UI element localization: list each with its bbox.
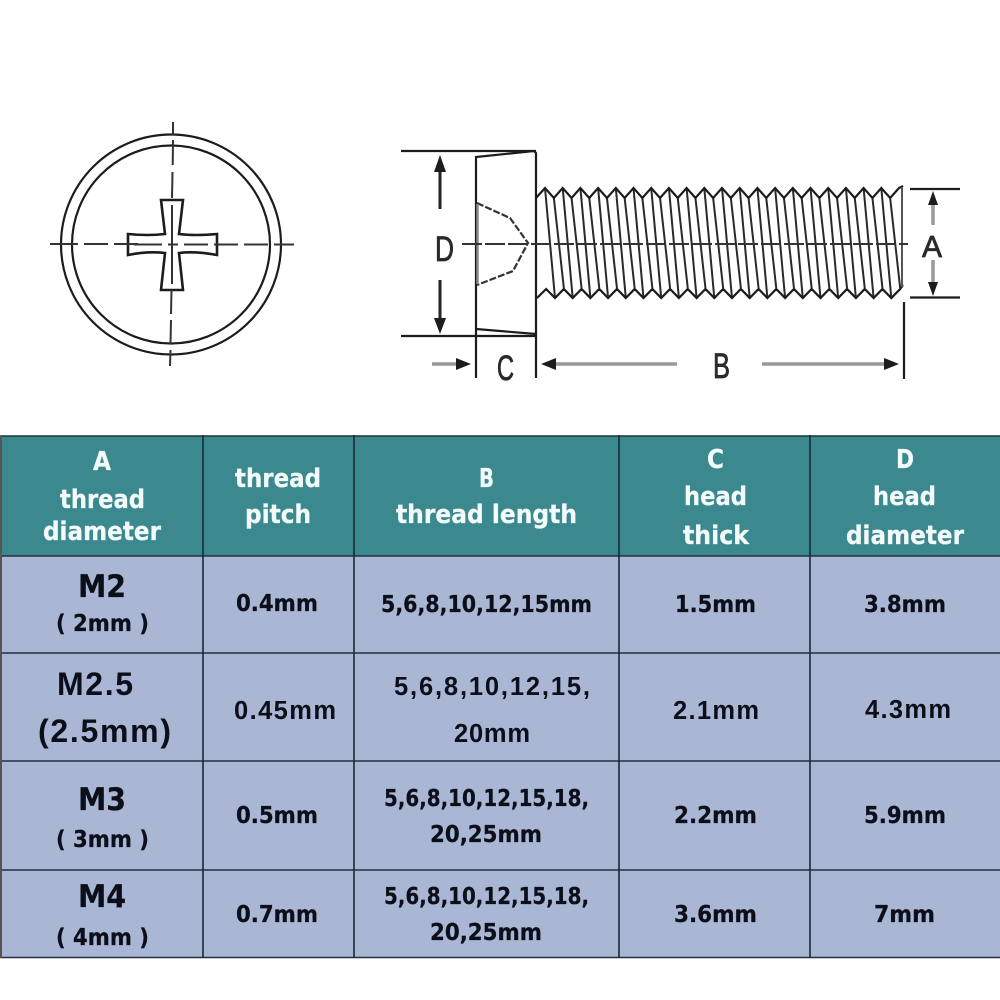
row M2 <box>56 569 946 637</box>
row M3: 5,6,8,10,12,15,18, <box>384 786 589 812</box>
dimension D <box>401 151 536 336</box>
header row: C <box>707 445 724 475</box>
recess left edge <box>476 204 479 284</box>
thread end edge <box>901 187 903 287</box>
row M2.5: 2.1mm <box>673 697 759 725</box>
dimension A <box>910 189 960 298</box>
row M3: 2.2mm <box>674 803 757 829</box>
dimension B <box>713 302 904 386</box>
table header background <box>2 436 1000 556</box>
screw head outline <box>476 151 536 378</box>
row M2.5: 0.45mm <box>234 697 336 725</box>
phillips cross recess <box>128 200 217 290</box>
side view diagram: screw with dimensions <box>401 151 960 388</box>
thread bottom crests <box>537 285 903 298</box>
row M2: ( 2mm ) <box>56 611 149 637</box>
dimension C <box>432 349 677 388</box>
header row: head <box>873 482 936 512</box>
header row: pitch <box>245 500 311 530</box>
header row <box>43 445 964 551</box>
header row: A <box>93 447 111 477</box>
row M3 <box>56 782 946 853</box>
top view diagram: screw head <box>50 122 294 366</box>
head outer circle <box>61 134 281 354</box>
row M4: 7mm <box>874 902 935 928</box>
row M3: 0.5mm <box>236 803 318 829</box>
row M2: M2 <box>78 569 126 605</box>
dimension A: A <box>922 229 942 264</box>
specification table <box>0 435 1000 958</box>
row M4: ( 4mm ) <box>56 925 149 951</box>
header row: head <box>684 482 747 512</box>
header row: thread <box>235 464 321 494</box>
header row: diameter <box>846 521 964 551</box>
row M3: 5.9mm <box>864 803 946 829</box>
vertical centre line <box>170 122 173 366</box>
row M2.5: (2.5mm) <box>38 713 171 749</box>
thread profile <box>536 186 903 298</box>
thread flank lines <box>545 188 900 298</box>
row M2: 0.4mm <box>236 591 318 617</box>
row M4: 3.6mm <box>674 902 757 928</box>
centre line <box>462 243 908 245</box>
row M4: M4 <box>78 879 126 915</box>
dimension C: C <box>497 349 514 388</box>
row M2: 5,6,8,10,12,15mm <box>381 592 592 618</box>
row M4: 20,25mm <box>430 920 542 946</box>
header row: D <box>896 445 914 475</box>
header row: B <box>479 464 494 494</box>
thread top crests <box>536 186 903 198</box>
row M4 <box>56 879 935 951</box>
table body background <box>2 556 1000 958</box>
header row: thread <box>60 485 145 515</box>
row M2: 1.5mm <box>675 592 756 618</box>
row M3: M3 <box>78 782 126 818</box>
row M3: 20,25mm <box>430 822 542 848</box>
header row: thread length <box>396 500 577 530</box>
row M4: 0.7mm <box>236 902 318 928</box>
dimension B: B <box>713 347 730 386</box>
horizontal centre line <box>50 243 294 246</box>
row M2.5: 4.3mm <box>865 696 951 724</box>
head inner circle <box>72 146 270 344</box>
row M2: 3.8mm <box>864 592 946 618</box>
header row: diameter <box>43 517 161 547</box>
row M2.5 <box>38 666 951 749</box>
recess dashed profile <box>477 203 528 285</box>
row M2.5: 5,6,8,10,12,15, <box>394 673 590 701</box>
dimension D: D <box>435 230 454 269</box>
row M3: ( 3mm ) <box>56 827 149 853</box>
row M2.5: 20mm <box>454 720 530 748</box>
row M2.5: M2.5 <box>57 666 133 702</box>
header row: thick <box>683 521 750 551</box>
row M4: 5,6,8,10,12,15,18, <box>384 884 589 910</box>
